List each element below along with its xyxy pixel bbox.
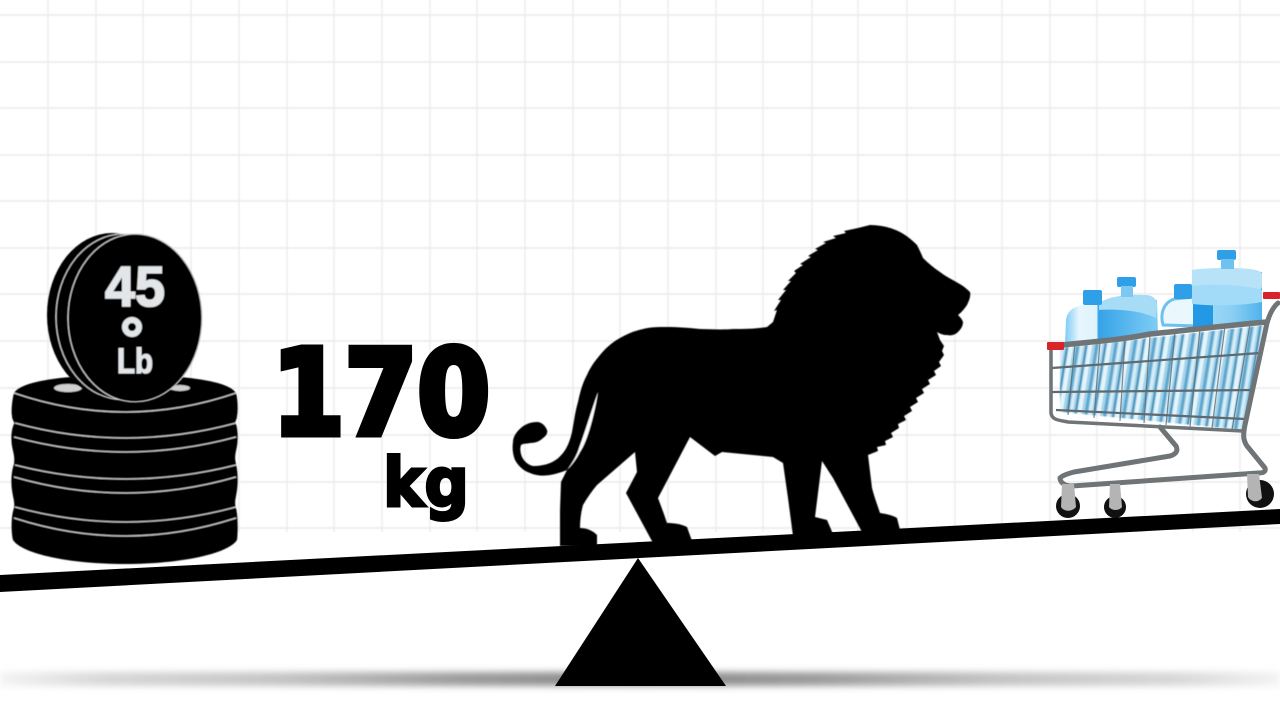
cart wheels	[1056, 474, 1274, 518]
icon: shopping cart with water jugs	[1047, 250, 1280, 518]
left water jug	[1065, 277, 1158, 345]
unit kg: kg	[383, 444, 469, 523]
icon: upright 45 lb plate	[47, 233, 202, 402]
plate unit Lb: Lb	[117, 342, 153, 381]
cart frame	[1051, 303, 1278, 486]
small water jug middle	[1162, 284, 1200, 326]
lion body	[513, 225, 970, 546]
plate hub right	[170, 385, 190, 391]
plate number 45: 45	[105, 255, 165, 319]
ground shadow	[0, 672, 1280, 686]
basket wires	[1052, 324, 1260, 430]
middle disc	[56, 234, 190, 400]
icon: lion silhouette	[513, 225, 970, 546]
plate hub left	[54, 384, 82, 392]
seesaw fulcrum triangle	[555, 558, 726, 686]
plate ring	[125, 320, 139, 334]
icon: stack of weight plates	[11, 375, 238, 564]
basket contents	[1060, 325, 1266, 430]
gap between tail and rump	[567, 392, 598, 470]
cart grip right	[1263, 292, 1280, 299]
plate rim lines	[14, 393, 236, 536]
back disc	[47, 233, 177, 397]
stacked plates silhouette	[11, 375, 238, 564]
seesaw beam	[0, 509, 1280, 592]
right water jug	[1192, 250, 1262, 332]
background grid	[0, 0, 1280, 532]
front disc	[68, 234, 202, 402]
cart grip left	[1047, 342, 1064, 350]
value 170: 170	[272, 324, 490, 462]
